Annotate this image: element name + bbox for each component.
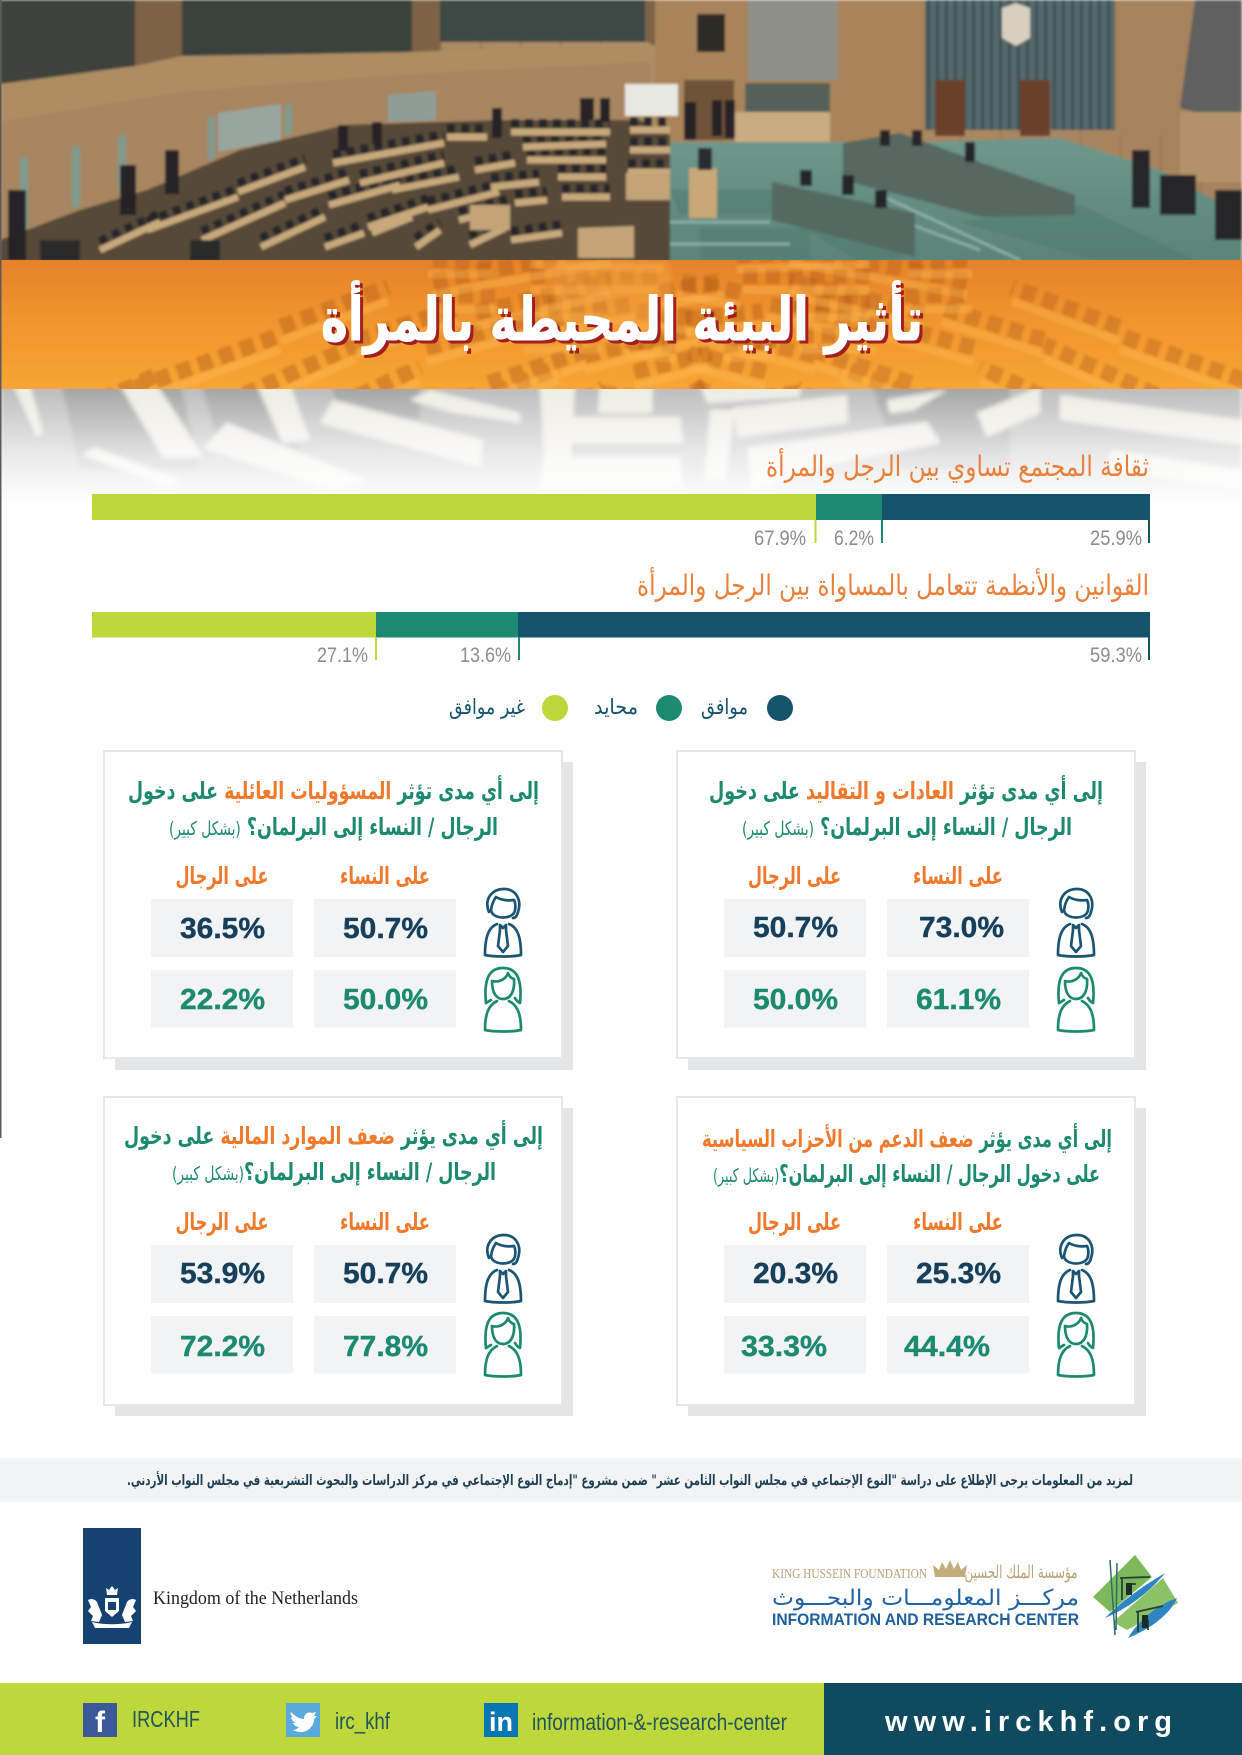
- data cells: 20.3%: [753, 1258, 838, 1290]
- icon: facebook: [83, 1703, 117, 1739]
- icon: coat of arms: [88, 1586, 136, 1628]
- icon: woman: [1058, 968, 1094, 1032]
- stacked bar chart: laws and regulations: [92, 566, 1150, 667]
- icon: linkedin: [484, 1703, 518, 1737]
- column labels: [748, 1208, 1003, 1236]
- column labels: على النساء: [340, 1208, 430, 1236]
- data cells: 50.0%: [753, 984, 838, 1016]
- column labels: [176, 862, 430, 890]
- heading: إلى أي مدى يؤثر ضعف الدعم من الأحزاب السياسية: [702, 1123, 1112, 1153]
- column labels: [176, 1208, 430, 1236]
- legend: موافق: [701, 695, 748, 719]
- faded photo below the band: [2, 389, 1242, 484]
- legend: غير موافق: [449, 695, 525, 719]
- heading: الرجال / النساء إلى البرلمان؟(بشكل كبير): [172, 1158, 496, 1186]
- stacked bar chart: laws and regulations: 13.6%: [460, 644, 511, 667]
- logo: Kingdom of the Netherlands: [83, 1528, 358, 1644]
- icon: linkedin: in: [489, 1707, 513, 1737]
- icon: man: [485, 1235, 521, 1302]
- stacked bar chart: laws and regulations: 59.3%: [1090, 644, 1142, 667]
- logo text: KING HUSSEIN FOUNDATION: [772, 1567, 927, 1582]
- icon: woman: [485, 1313, 521, 1376]
- stacked bar chart: society culture: 6.2%: [834, 527, 874, 550]
- data cells: 33.3%: [741, 1331, 827, 1363]
- data cells: 44.4%: [904, 1331, 990, 1363]
- icon: crown: [933, 1560, 967, 1577]
- logo text: [772, 1560, 1079, 1629]
- heading: إلى أي مدى تؤثر العادات و التقاليد على دخول: [709, 775, 1103, 805]
- panel: family responsibilities: [104, 751, 573, 1070]
- heading: إلى أي مدى تؤثر المسؤوليات العائلية على دخول: [128, 775, 539, 805]
- data cells: 25.3%: [916, 1258, 1001, 1290]
- footnote band: [0, 1458, 1242, 1502]
- heading: [128, 775, 539, 841]
- heading: إلى أي مدى يؤثر ضعف الموارد المالية على دخول: [124, 1120, 543, 1150]
- website: www.irckhf.org: [884, 1706, 1172, 1738]
- column labels: على النساء: [913, 1208, 1003, 1236]
- icon: IRC mark: [1093, 1555, 1178, 1638]
- heading: [709, 775, 1103, 841]
- legend: محايد: [594, 695, 638, 719]
- logo text: INFORMATION AND RESEARCH CENTER: [772, 1610, 1079, 1629]
- linkedin handle: information-&-research-center: [532, 1709, 787, 1735]
- data cells: 50.7%: [343, 913, 428, 945]
- facebook handle: IRCKHF: [132, 1706, 200, 1732]
- title: تأثير البيئة المحيطة بالمرأة: [321, 280, 923, 355]
- heading: الرجال / النساء إلى البرلمان؟ (بشكل كبير): [169, 813, 498, 841]
- icon: man: [485, 889, 521, 956]
- orange title band: [2, 260, 1242, 389]
- data cells: 77.8%: [343, 1331, 428, 1363]
- title: تأثير البيئة المحيطة بالمرأة: [324, 283, 926, 358]
- legend: [449, 695, 793, 721]
- data cells: [151, 899, 456, 1028]
- logo: Kingdom of the Netherlands: Kingdom of the Netherlands: [153, 1588, 358, 1609]
- stacked bar chart: laws and regulations: 27.1%: [317, 644, 368, 667]
- data cells: 50.7%: [343, 1258, 428, 1290]
- column labels: على الرجال: [176, 862, 268, 890]
- stacked bar chart: society culture: [92, 447, 1150, 550]
- column labels: [748, 862, 1003, 890]
- data cells: 50.7%: [753, 912, 838, 944]
- icon: facebook: f: [95, 1706, 106, 1739]
- panel: customs and traditions: [677, 751, 1146, 1070]
- data cells: [151, 1245, 456, 1374]
- icon: woman: [1058, 1313, 1094, 1376]
- data cells: [724, 1245, 1029, 1374]
- column labels: على الرجال: [748, 862, 841, 890]
- column labels: على الرجال: [176, 1208, 268, 1236]
- icon: woman: [485, 968, 521, 1032]
- icon: twitter: [286, 1703, 320, 1737]
- background photo: parliament chamber: [0, 0, 1242, 262]
- icon: man: [1058, 889, 1094, 956]
- panel: weak financial resources: [104, 1097, 573, 1416]
- stacked bar chart: society culture: 25.9%: [1090, 527, 1142, 550]
- icon: man: [1058, 1235, 1094, 1302]
- stacked bar chart: society culture: 67.9%: [754, 527, 806, 550]
- logo: Information and Research Center: [772, 1555, 1178, 1638]
- data cells: 50.0%: [343, 984, 428, 1016]
- logo text: مركـــز المعلومـــات والبحـــوث: [772, 1586, 1079, 1611]
- logo text: مؤسسة الملك الحسين: [964, 1562, 1078, 1583]
- left edge line: [0, 0, 2, 1138]
- column labels: على النساء: [340, 862, 430, 890]
- data cells: 72.2%: [180, 1331, 265, 1363]
- heading: الرجال / النساء إلى البرلمان؟ (بشكل كبير): [742, 813, 1072, 841]
- heading: على دخول الرجال / النساء إلى البرلمان؟(بشكل كبير): [713, 1160, 1100, 1188]
- data cells: 73.0%: [919, 912, 1004, 944]
- footer bar: [0, 1683, 1242, 1755]
- heading: [702, 1123, 1112, 1188]
- data cells: 61.1%: [916, 984, 1001, 1016]
- column labels: على النساء: [913, 862, 1003, 890]
- data cells: 53.9%: [180, 1258, 265, 1290]
- panel: weak party support: [677, 1097, 1146, 1416]
- heading: laws: القوانين والأنظمة تتعامل بالمساواة بين الرجل والمرأة: [637, 566, 1149, 602]
- heading: [124, 1120, 543, 1186]
- column labels: على الرجال: [748, 1208, 841, 1236]
- data cells: [724, 899, 1029, 1028]
- heading: society culture: ثقافة المجتمع تساوي بين الرجل والمرأة: [766, 447, 1149, 483]
- twitter handle: irc_khf: [335, 1708, 390, 1734]
- data cells: 36.5%: [180, 913, 265, 945]
- data cells: 22.2%: [180, 984, 265, 1016]
